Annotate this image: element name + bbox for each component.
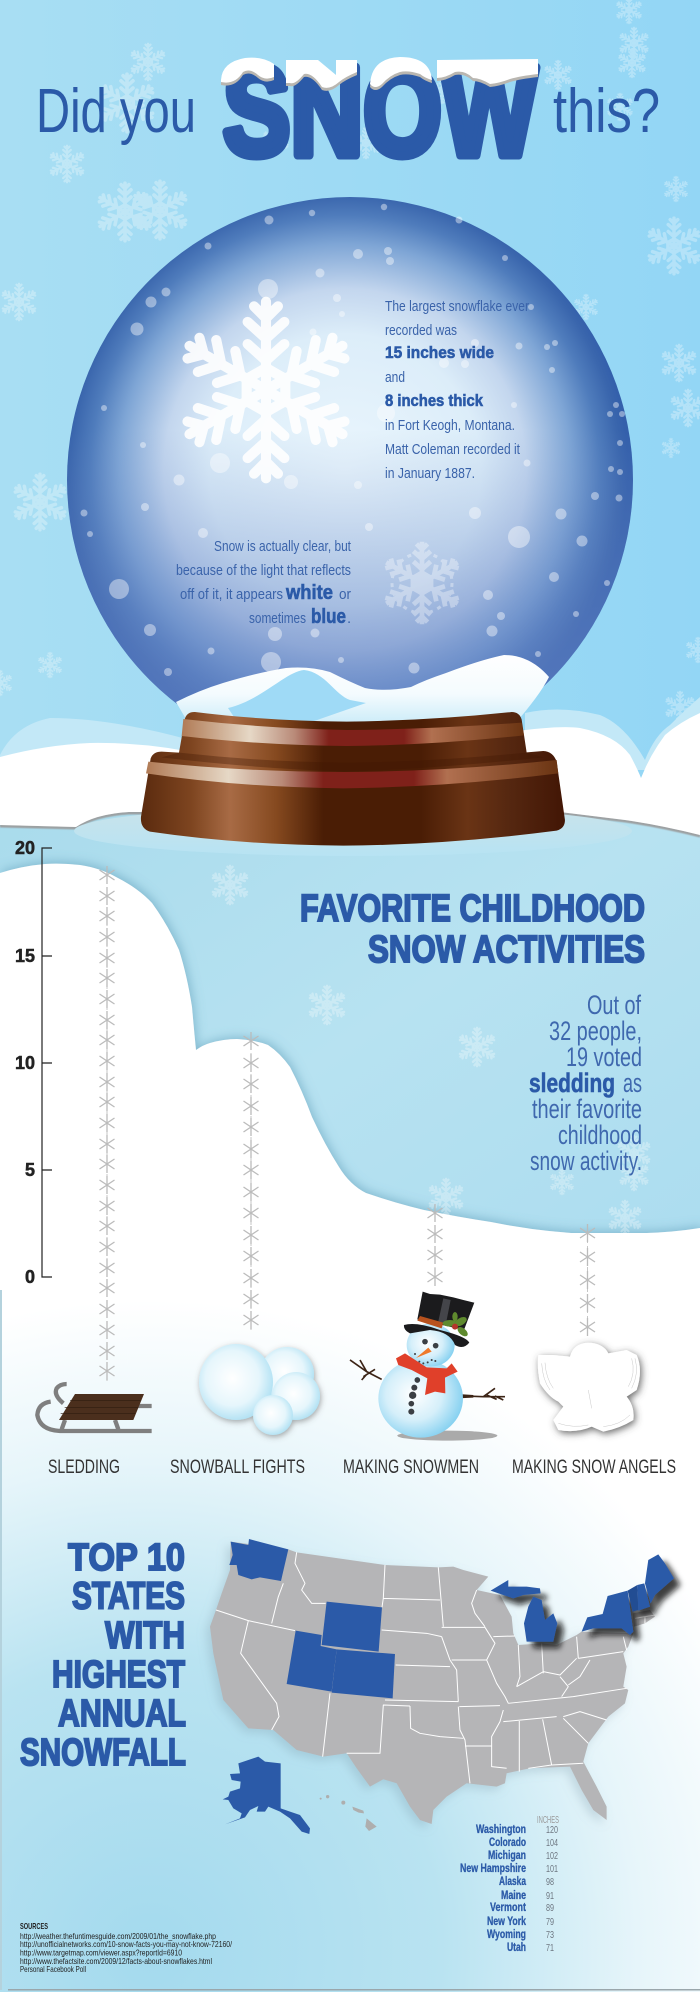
map: new york, vermont, new hampshire, maine bbox=[582, 1554, 674, 1635]
axis labels: 20 bbox=[15, 838, 35, 858]
map: southern new england bbox=[633, 1610, 655, 1627]
globe fact: snow is clear: off of it, it appears bbox=[180, 586, 283, 603]
legend values: 120 bbox=[546, 1824, 558, 1836]
axis labels bbox=[15, 838, 35, 1287]
globe fact: largest snowflake: Matt Coleman recorded it bbox=[385, 441, 521, 458]
sources: SOURCES bbox=[20, 1921, 48, 1931]
map: gray states bbox=[210, 1542, 633, 1824]
axis labels: 15 bbox=[15, 946, 35, 966]
legend values: 89 bbox=[546, 1902, 554, 1914]
axis labels: 0 bbox=[25, 1267, 35, 1287]
ice plate under globe bbox=[74, 806, 632, 856]
legend state names: Wyoming bbox=[487, 1929, 526, 1941]
icon: sled bbox=[37, 1384, 152, 1431]
left page edge bbox=[0, 1290, 2, 1990]
star column: sledding 19 bbox=[100, 866, 114, 1384]
sources: Personal Facebook Poll bbox=[20, 1964, 86, 1974]
callout: out of 32 people: Out of bbox=[587, 990, 641, 1020]
map: washington bbox=[229, 1539, 288, 1581]
background: winter sky bbox=[0, 0, 700, 840]
legend header: INCHES bbox=[537, 1815, 559, 1826]
title bbox=[36, 40, 660, 182]
heading: top 10 states: WITH bbox=[105, 1615, 185, 1657]
sources: http://unofficialnetworks.com/10-snow-facts-you-may-not-know-72160/ bbox=[20, 1939, 233, 1949]
icon: snowman bbox=[350, 1292, 505, 1441]
globe fact: largest snowflake: 8 inches thick bbox=[385, 391, 483, 410]
title snow cap bbox=[221, 57, 538, 91]
legend state names bbox=[460, 1824, 526, 1954]
title word: this?: this? bbox=[553, 77, 660, 146]
globe fact: snow is clear: sometimes bbox=[249, 610, 306, 627]
sources: http://weather.thefuntimesguide.com/2009/01/the_snowflake.php bbox=[20, 1931, 216, 1941]
background snowflakes: top bbox=[0, 0, 700, 722]
chart y axis bbox=[15, 838, 52, 1287]
base body bbox=[141, 712, 565, 846]
callout: out of 32 people: sledding bbox=[529, 1068, 615, 1098]
star column: making snow angels bbox=[580, 1224, 595, 1336]
map: alaska bbox=[223, 1757, 310, 1834]
globe lower shading bbox=[67, 197, 633, 763]
legend state names: Maine bbox=[501, 1890, 526, 1902]
globe fact: snow is clear: blue bbox=[311, 606, 346, 628]
globe fact: largest snowflake bbox=[385, 298, 529, 482]
activity labels: SNOWBALL FIGHTS bbox=[170, 1457, 305, 1478]
legend values: 98 bbox=[546, 1876, 554, 1888]
legend values: 71 bbox=[546, 1942, 554, 1954]
axis line and ticks bbox=[42, 848, 52, 1277]
snow globe wooden base bbox=[141, 712, 565, 846]
activity labels: MAKING SNOWMEN bbox=[343, 1457, 479, 1478]
pale snow drift behind base bbox=[0, 697, 700, 770]
icon: snowballs bbox=[199, 1344, 320, 1435]
globe fact: largest snowflake: in January 1887. bbox=[385, 465, 475, 482]
snow hill chart background bbox=[0, 864, 700, 1992]
base tier shadow bbox=[162, 753, 543, 771]
map: colorado bbox=[332, 1649, 395, 1698]
globe fact: largest snowflake: in Fort Keogh, Montana. bbox=[385, 417, 515, 434]
axis labels: 10 bbox=[15, 1053, 35, 1073]
map: michigan bbox=[491, 1580, 557, 1642]
heading: top 10 states bbox=[20, 1537, 186, 1774]
sources bbox=[20, 1921, 233, 1974]
map: wyoming bbox=[322, 1602, 382, 1652]
legend values: 104 bbox=[546, 1837, 558, 1849]
legend values: 91 bbox=[546, 1890, 554, 1902]
snow globe bbox=[67, 197, 633, 763]
base lower band bbox=[146, 760, 558, 788]
star column: snowball fights bbox=[244, 1032, 258, 1330]
globe fact: largest snowflake: 15 inches wide bbox=[385, 343, 494, 362]
legend values bbox=[546, 1824, 558, 1954]
axis labels: 5 bbox=[25, 1160, 35, 1180]
activity labels bbox=[48, 1457, 676, 1478]
callout: out of 32 people: their favorite bbox=[532, 1094, 642, 1124]
heading: top 10 states: SNOWFALL bbox=[20, 1732, 186, 1774]
legend state names: Colorado bbox=[489, 1837, 526, 1849]
legend state names: New Hampshire bbox=[460, 1863, 526, 1875]
icon: small lace snowflake in globe bbox=[382, 542, 462, 624]
map: hawaii bbox=[320, 1795, 377, 1831]
globe fact: snow is clear: or bbox=[339, 586, 351, 603]
legend values: 102 bbox=[546, 1850, 558, 1862]
snow heap inside globe bbox=[176, 655, 549, 726]
heading: top 10 states: HIGHEST bbox=[52, 1654, 185, 1696]
globe fact: largest snowflake: recorded was bbox=[385, 322, 457, 339]
activity labels: SLEDDING bbox=[48, 1457, 120, 1478]
base upper band bbox=[182, 719, 524, 746]
globe fact: snow is clear: . bbox=[347, 610, 351, 627]
heading: favorite childhood snow activities: SNOW ACTIVITIES bbox=[368, 929, 645, 971]
legend state names: Alaska bbox=[499, 1876, 526, 1888]
callout: out of 32 people bbox=[529, 990, 642, 1176]
globe glass bbox=[67, 197, 633, 763]
legend values: 101 bbox=[546, 1863, 558, 1875]
map: state borders bbox=[216, 1552, 655, 1783]
sources: http://www.targetmap.com/viewer.aspx?reportId=6910 bbox=[20, 1948, 182, 1958]
callout: out of 32 people: childhood bbox=[558, 1120, 642, 1150]
title word: Did you: Did you bbox=[36, 77, 196, 146]
callout: out of 32 people: snow activity. bbox=[530, 1146, 642, 1176]
globe fact: snow is clear: white bbox=[285, 582, 333, 604]
legend values: 73 bbox=[546, 1929, 554, 1941]
heading: top 10 states: STATES bbox=[72, 1576, 185, 1618]
legend state names: Michigan bbox=[488, 1850, 526, 1862]
bottom page edge bbox=[8, 1989, 700, 1990]
heading: favorite childhood snow activities bbox=[300, 888, 645, 971]
globe fact: snow is clear: Snow is actually clear, but bbox=[214, 538, 352, 555]
sources: http://www.thefactsite.com/2009/12/facts-about-snowflakes.html bbox=[20, 1956, 212, 1966]
legend values: 79 bbox=[546, 1916, 554, 1928]
heading: top 10 states: ANNUAL bbox=[58, 1693, 186, 1735]
heading: top 10 states: TOP 10 bbox=[68, 1537, 185, 1579]
legend state names: Washington bbox=[476, 1824, 526, 1836]
callout: out of 32 people: 19 voted bbox=[566, 1042, 642, 1072]
background: lower blue section bbox=[0, 800, 700, 1280]
globe fact: largest snowflake: The largest snowflake ever bbox=[385, 298, 529, 315]
map: utah bbox=[287, 1631, 337, 1692]
icon: snow angel bbox=[538, 1343, 640, 1432]
title word: SNOW: SNOW bbox=[223, 40, 537, 182]
globe fact: snow is clear bbox=[176, 538, 352, 628]
star column: making snowmen bbox=[428, 1204, 442, 1286]
icon: big snowflake in globe bbox=[180, 302, 352, 478]
globe fact: snow is clear: because of the light that reflects bbox=[176, 562, 351, 579]
map: united states bbox=[210, 1539, 674, 1824]
globe fact: largest snowflake: and bbox=[385, 369, 405, 386]
legend state names: Vermont bbox=[490, 1902, 526, 1914]
globe floating snow dots bbox=[80, 204, 625, 676]
legend state names: New York bbox=[487, 1916, 526, 1928]
background snowflakes: chart section bbox=[211, 866, 651, 1235]
white snow banks bbox=[0, 713, 700, 835]
callout: out of 32 people: 32 people, bbox=[549, 1016, 642, 1046]
legend: inches per state bbox=[460, 1815, 559, 1954]
callout: out of 32 people: as bbox=[623, 1068, 642, 1098]
legend state names: Utah bbox=[507, 1942, 526, 1954]
